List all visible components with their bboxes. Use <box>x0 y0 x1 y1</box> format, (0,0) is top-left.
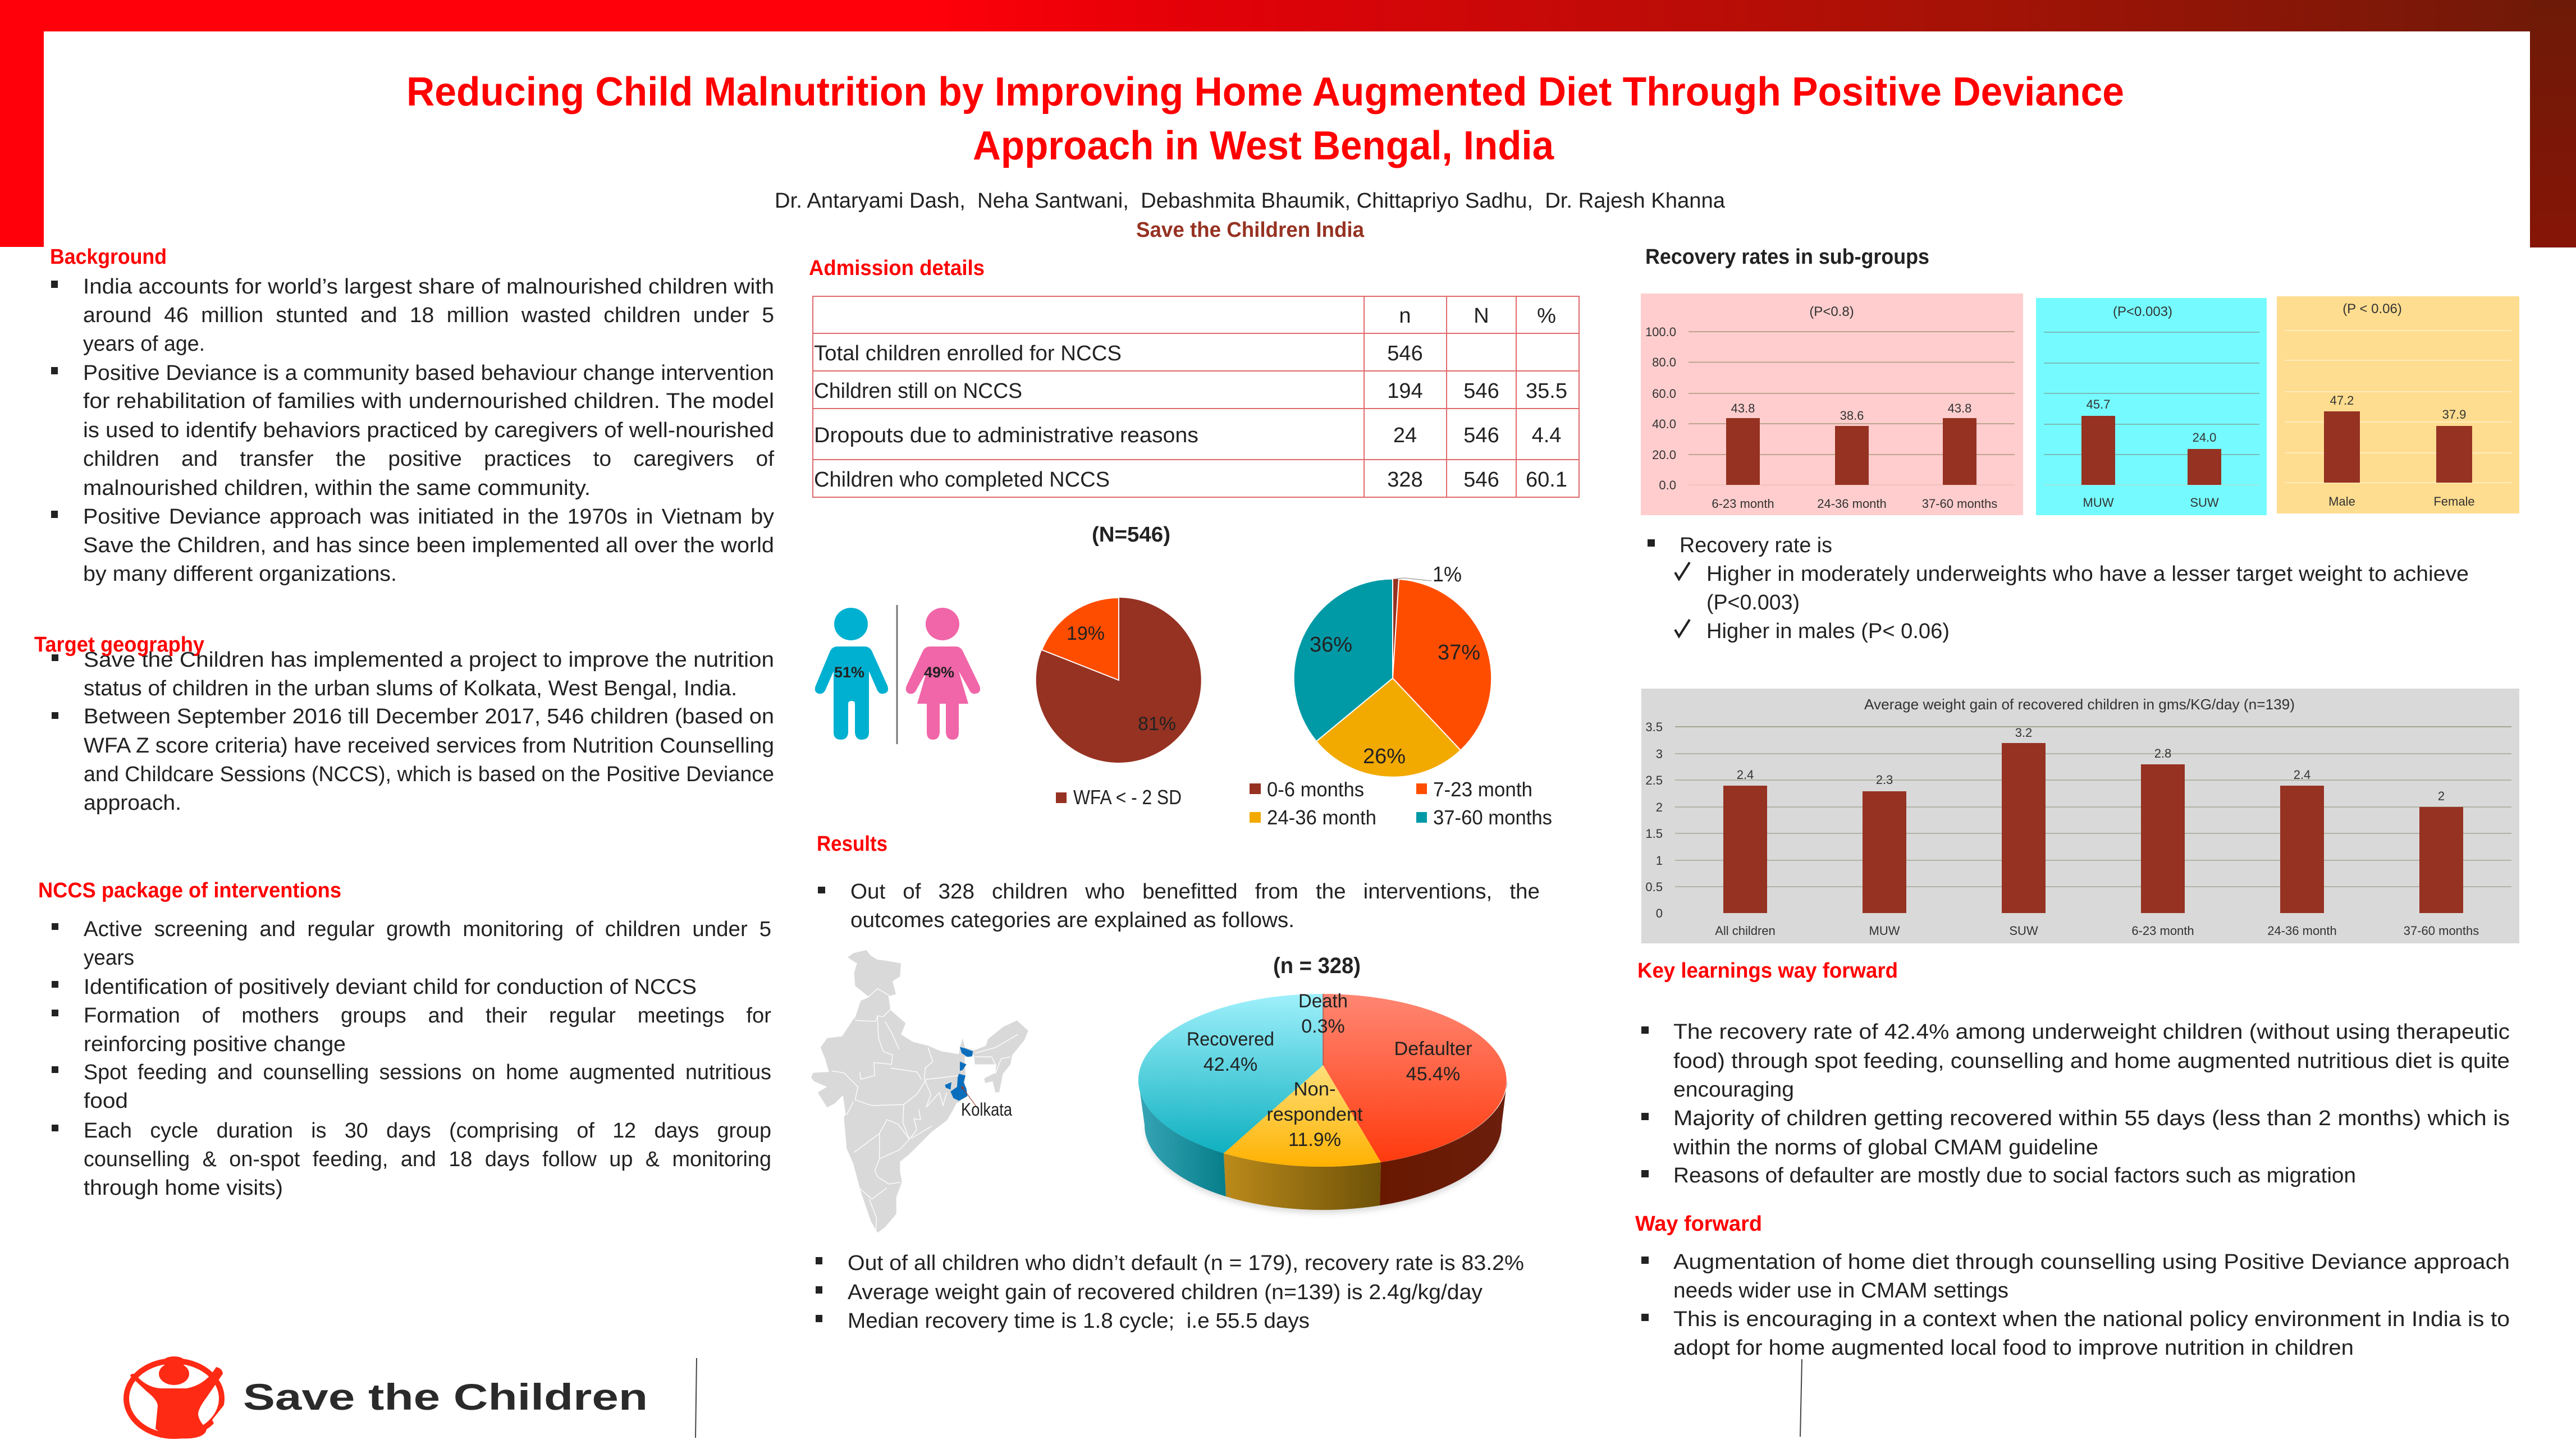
table: admission details: 4.4 <box>1532 424 1561 447</box>
pie chart: age groups: 37% <box>1438 641 1480 664</box>
text block: recovery rate notes: Higher in males (P< 0.06) <box>1706 620 1950 643</box>
bar chart: recovery by underweight class <box>2036 298 2267 515</box>
text block: background bullets: by many different organizations. <box>83 562 397 586</box>
bar chart: recovery by age: (P<0.8) <box>1809 304 1854 319</box>
bar chart: recovery by age: 40.0 <box>1652 417 1676 431</box>
text block: results bullets: Average weight gain of recovered children (n=139) is 2.4g/kg/day <box>848 1281 1483 1304</box>
bar chart: average weight gain: SUW <box>2009 924 2038 938</box>
text block: recovery rate notes: Recovery rate is <box>1680 534 1832 557</box>
text block: way forward bullets: Augmentation of home diet through counselling using Positive Deviance approach <box>1673 1250 2510 1274</box>
organisation: Save the Children India <box>1136 218 1365 242</box>
text block: key learnings bullets: The recovery rate of 42.4% among underweight children (without using therapeutic <box>1673 1020 2510 1044</box>
bar chart: recovery by sex: Female <box>2433 494 2475 508</box>
bar chart: recovery by age: 37-60 months <box>1922 497 1997 511</box>
logo: Save the Children <box>126 1356 648 1438</box>
text block: target geography bullets <box>52 648 774 815</box>
legend: age groups: 37-60 months <box>1433 806 1552 829</box>
panel: results <box>817 832 1540 932</box>
bar chart: recovery by underweight class: MUW <box>2083 496 2114 510</box>
title: Approach in West Bengal, India <box>973 123 1554 168</box>
bar chart: average weight gain: 37-60 months <box>2404 924 2479 938</box>
text block: key learnings bullets <box>1641 1020 2510 1187</box>
text block: NCCS bullets: Each cycle duration is 30 days (comprising of 12 days group <box>84 1119 771 1143</box>
pie chart: WFA: 19% <box>1067 623 1105 644</box>
bar chart: average weight gain: 24-36 month <box>2267 924 2337 938</box>
3D pie chart: outcomes: Non- <box>1293 1079 1336 1100</box>
pie chart: age groups: 26% <box>1363 745 1406 768</box>
3D pie chart: outcomes: 42.4% <box>1204 1054 1257 1075</box>
bar chart: recovery by age: 0.0 <box>1659 478 1676 492</box>
text block: key learnings bullets: Reasons of defaulter are mostly due to social factors such as migration <box>1673 1164 2356 1187</box>
bar chart: average weight gain: 0.5 <box>1645 880 1663 894</box>
bar chart: average weight gain: 1.5 <box>1645 827 1663 841</box>
heading: way forward: Way forward <box>1635 1212 1762 1236</box>
bar chart: recovery by age: 38.6 <box>1840 409 1864 423</box>
text block: background bullets: malnourished children, within the same community. <box>83 476 591 500</box>
bar chart: recovery by age: 80.0 <box>1652 355 1676 369</box>
bar chart: average weight gain: 6-23 month <box>2131 924 2194 938</box>
heading: N=546: (N=546) <box>1092 523 1170 547</box>
bar chart: recovery by sex <box>2277 296 2519 513</box>
text block: NCCS bullets: Active screening and regular growth monitoring of children under 5 <box>84 918 771 941</box>
text block: background bullets: Positive Deviance approach was initiated in the 1970s in Vietnam by <box>83 505 774 529</box>
bar chart: recovery by age: 24-36 month <box>1817 497 1887 511</box>
text block: results intro: Out of 328 children who benefitted from the interventions, the <box>850 880 1540 904</box>
map: India with Kolkata <box>811 950 1028 1233</box>
map: India with Kolkata: Kolkata <box>961 1099 1012 1120</box>
heading: results: Results <box>817 832 887 856</box>
text block: results intro <box>818 880 1540 932</box>
bar chart: recovery by age: 60.0 <box>1652 387 1676 401</box>
panel: way forward <box>1635 1212 2510 1360</box>
legend: age groups: 0-6 months <box>1267 778 1364 801</box>
pie chart: WFA: 81% <box>1138 713 1176 735</box>
bar chart: average weight gain: 2.8 <box>2154 746 2171 760</box>
text block: NCCS bullets: through home visits) <box>84 1176 283 1200</box>
legend: age groups: 7-23 month <box>1433 778 1532 801</box>
text block: NCCS bullets: years <box>84 946 134 970</box>
text block: background bullets: around 46 million stunted and 18 million wasted children under 5 <box>83 304 774 327</box>
text block: background bullets: children and transfer the positive practices to caregivers of <box>83 447 774 471</box>
table: admission details: Children who completed NCCS <box>814 468 1110 492</box>
text block: results bullets: Median recovery time is 1.8 cycle; i.e 55.5 days <box>848 1309 1310 1333</box>
text block: background bullets: Save the Children, and has since been implemented all over the world <box>83 534 774 557</box>
table: admission details: 546 <box>1463 468 1499 492</box>
bar chart: recovery by age: 20.0 <box>1652 448 1676 462</box>
bar chart: average weight gain: Average weight gain of recovered children in gms/KG/day (n=139) <box>1864 696 2295 713</box>
text block: way forward bullets <box>1641 1250 2510 1360</box>
bar chart: recovery by underweight class: (P<0.003) <box>2113 304 2172 319</box>
bar chart: average weight gain <box>1641 689 2519 943</box>
bar chart: average weight gain: 2.4 <box>2294 768 2310 782</box>
3D pie chart: outcomes <box>1138 991 1507 1213</box>
bar chart: average weight gain: 2 <box>1656 800 1663 814</box>
legend: age groups <box>1250 778 1552 829</box>
3D pie chart: outcomes: respondent <box>1266 1104 1363 1125</box>
logo wordmark: Save the Children <box>243 1376 648 1418</box>
pie chart: age groups <box>1250 563 1552 829</box>
bar chart: average weight gain: 2.3 <box>1876 773 1893 787</box>
3D pie chart: outcomes: 11.9% <box>1288 1129 1341 1150</box>
text block: recovery rate notes <box>1648 534 2469 643</box>
bar chart: average weight gain: 3.5 <box>1645 720 1663 734</box>
bar chart: average weight gain: 2.5 <box>1645 773 1663 787</box>
pie chart: WFA: WFA < - 2 SD <box>1073 786 1182 809</box>
text block: NCCS bullets: Identification of positively deviant child for conduction of NCCS <box>84 975 697 999</box>
panel: background <box>50 245 774 586</box>
table: admission details <box>813 296 1579 497</box>
table: admission details: n <box>1399 304 1411 328</box>
text block: NCCS bullets: food <box>84 1089 128 1113</box>
bar chart: recovery by sex: 37.9 <box>2442 407 2466 421</box>
heading: recovery rates: Recovery rates in sub-groups <box>1645 245 1929 269</box>
heading: key learnings: Key learnings way forward <box>1637 959 1898 983</box>
text block: NCCS bullets: Spot feeding and counselling sessions on home augmented nutritious <box>84 1061 771 1084</box>
heading: background: Background <box>50 245 167 269</box>
text block: background bullets: India accounts for world’s largest share of malnourished children with <box>83 275 774 299</box>
text block: key learnings bullets: encouraging <box>1673 1078 1794 1102</box>
3D pie chart: outcomes: Death <box>1298 991 1348 1012</box>
text block: key learnings bullets: within the norms of global CMAM guideline <box>1673 1136 2098 1159</box>
authors: Dr. Antaryami Dash, Neha Santwani, Debashmita Bhaumik, Chittapriyo Sadhu, Dr. Rajesh Khanna <box>775 189 1726 213</box>
table: admission details: 546 <box>1387 342 1423 365</box>
text block: background bullets: is used to identify behaviors practiced by caregivers of well-nourished <box>83 419 774 442</box>
bar chart: recovery by sex: 47.2 <box>2330 393 2354 407</box>
bar chart: recovery by age: 43.8 <box>1731 401 1755 415</box>
table: admission details: Children still on NCCS <box>814 379 1022 403</box>
bar chart: recovery by underweight class: 24.0 <box>2193 430 2216 444</box>
bar chart: average weight gain: 2 <box>2438 789 2445 803</box>
panel: NCCS package of interventions <box>38 879 771 1200</box>
table: admission details: 546 <box>1463 424 1499 447</box>
bar chart: recovery by age: 43.8 <box>1948 401 1971 415</box>
header frame: red gradient border <box>0 0 2576 247</box>
bar chart: average weight gain: 2.4 <box>1737 768 1754 782</box>
text block: background bullets: years of age. <box>83 332 205 356</box>
3D pie chart: outcomes: 45.4% <box>1406 1063 1460 1085</box>
text block: NCCS bullets: reinforcing positive change <box>84 1033 346 1056</box>
panel: target geography <box>34 633 774 815</box>
table: admission details: Total children enrolled for NCCS <box>814 342 1122 365</box>
icon: girl 49% <box>906 608 980 740</box>
icon: check mark <box>1675 562 1690 579</box>
pie chart: age groups: 1% <box>1433 563 1462 586</box>
text block: way forward bullets: adopt for home augmented local food to improve nutrition in children <box>1673 1336 2354 1360</box>
table: admission details: 35.5 <box>1526 379 1567 403</box>
text block: way forward bullets: This is encouraging in a context when the national policy environment in India is to <box>1673 1308 2510 1331</box>
title: Reducing Child Malnutrition by Improving Home Augmented Diet Through Positive Deviance <box>406 70 2124 114</box>
3D pie chart: outcomes: Defaulter <box>1394 1038 1472 1060</box>
text block: target geography bullets: status of children in the urban slums of Kolkata, West Bengal, India. <box>84 677 737 700</box>
text block: recovery rate notes: Higher in moderately underweights who have a lesser target weight to achieve <box>1706 562 2469 586</box>
text block: key learnings bullets: Majority of children getting recovered within 55 days (less than 2 months) which is <box>1673 1107 2510 1130</box>
table: admission details: 546 <box>1463 379 1499 403</box>
text block: background bullets <box>51 275 774 586</box>
icon: boy 51% <box>815 608 888 740</box>
table: admission details: N <box>1474 304 1489 328</box>
table: admission details: 60.1 <box>1526 468 1567 492</box>
text block: results intro: outcomes categories are explained as follows. <box>850 909 1294 932</box>
bar chart: recovery by age: 6-23 month <box>1712 497 1774 511</box>
text block: target geography bullets: Between September 2016 till December 2017, 546 children (based on <box>84 705 774 728</box>
text block: way forward bullets: needs wider use in CMAM settings <box>1673 1279 2008 1303</box>
icon: girl 49%: 49% <box>924 664 954 681</box>
table: admission details: 328 <box>1387 468 1423 492</box>
bar chart: average weight gain: MUW <box>1869 924 1900 938</box>
panel: key learnings <box>1637 959 2510 1187</box>
text block: results bullets <box>816 1251 1524 1333</box>
bar chart: average weight gain: All children <box>1715 924 1776 938</box>
bar chart: average weight gain: 3.2 <box>2015 726 2032 740</box>
bar chart: average weight gain: 1 <box>1656 854 1663 868</box>
text block: target geography bullets: approach. <box>84 791 181 815</box>
table: admission details: % <box>1537 304 1556 328</box>
text block: NCCS bullets: Formation of mothers groups and their regular meetings for <box>84 1004 771 1028</box>
text block: target geography bullets: Save the Children has implemented a project to improve the nutrition <box>84 648 774 672</box>
text block: key learnings bullets: food) through spot feeding, counselling and home augmented nutritious diet is quite <box>1673 1049 2510 1073</box>
bar chart: recovery by underweight class: SUW <box>2190 496 2219 510</box>
3D pie chart: outcomes: Recovered <box>1187 1029 1274 1050</box>
icon: boy 51%: 51% <box>834 664 864 681</box>
bar chart: recovery by sex: (P < 0.06) <box>2342 301 2402 317</box>
icon: check mark <box>1675 620 1690 636</box>
bar chart: recovery by sex: Male <box>2328 494 2355 508</box>
heading: NCCS package: NCCS package of interventions <box>38 879 341 902</box>
heading: target geography: Target geography <box>34 633 204 657</box>
text block: results bullets: Out of all children who didn’t default (n = 179), recovery rate is 83.2% <box>848 1251 1524 1275</box>
heading: admission details: Admission details <box>809 256 985 280</box>
pie chart: age groups: 36% <box>1310 633 1352 657</box>
text block: recovery rate notes: (P<0.003) <box>1706 591 1800 615</box>
table: admission details: 24 <box>1393 424 1417 447</box>
bar chart: average weight gain: 0 <box>1656 906 1663 920</box>
pie chart: WFA <box>1036 598 1201 809</box>
title <box>406 70 2124 168</box>
bar chart: recovery by underweight class: 45.7 <box>2087 397 2110 411</box>
text block: background bullets: Positive Deviance is a community based behaviour change intervention <box>83 361 774 385</box>
text block: NCCS bullets: counselling & on-spot feeding, and 18 days follow up & monitoring <box>84 1148 771 1171</box>
text block: NCCS bullets <box>52 918 771 1200</box>
3D pie chart: outcomes: 0.3% <box>1301 1016 1345 1037</box>
table: admission details: 194 <box>1387 379 1423 403</box>
bar chart: average weight gain: 3 <box>1656 747 1663 761</box>
heading: n = 328: (n = 328) <box>1273 953 1361 978</box>
bar chart: recovery by age <box>1641 294 2023 515</box>
icon: child in circle <box>126 1356 226 1438</box>
text block: target geography bullets: WFA Z score criteria) have received services from Nutrition Counselling <box>84 734 774 758</box>
text block: target geography bullets: and Childcare Sessions (NCCS), which is based on the Positive Deviance <box>84 763 774 786</box>
text block: background bullets: for rehabilitation of families with undernourished children. The model <box>83 389 774 413</box>
table: admission details: Dropouts due to administrative reasons <box>814 424 1198 447</box>
bar chart: recovery by age: 100.0 <box>1645 325 1676 339</box>
legend: age groups: 24-36 month <box>1267 806 1376 829</box>
